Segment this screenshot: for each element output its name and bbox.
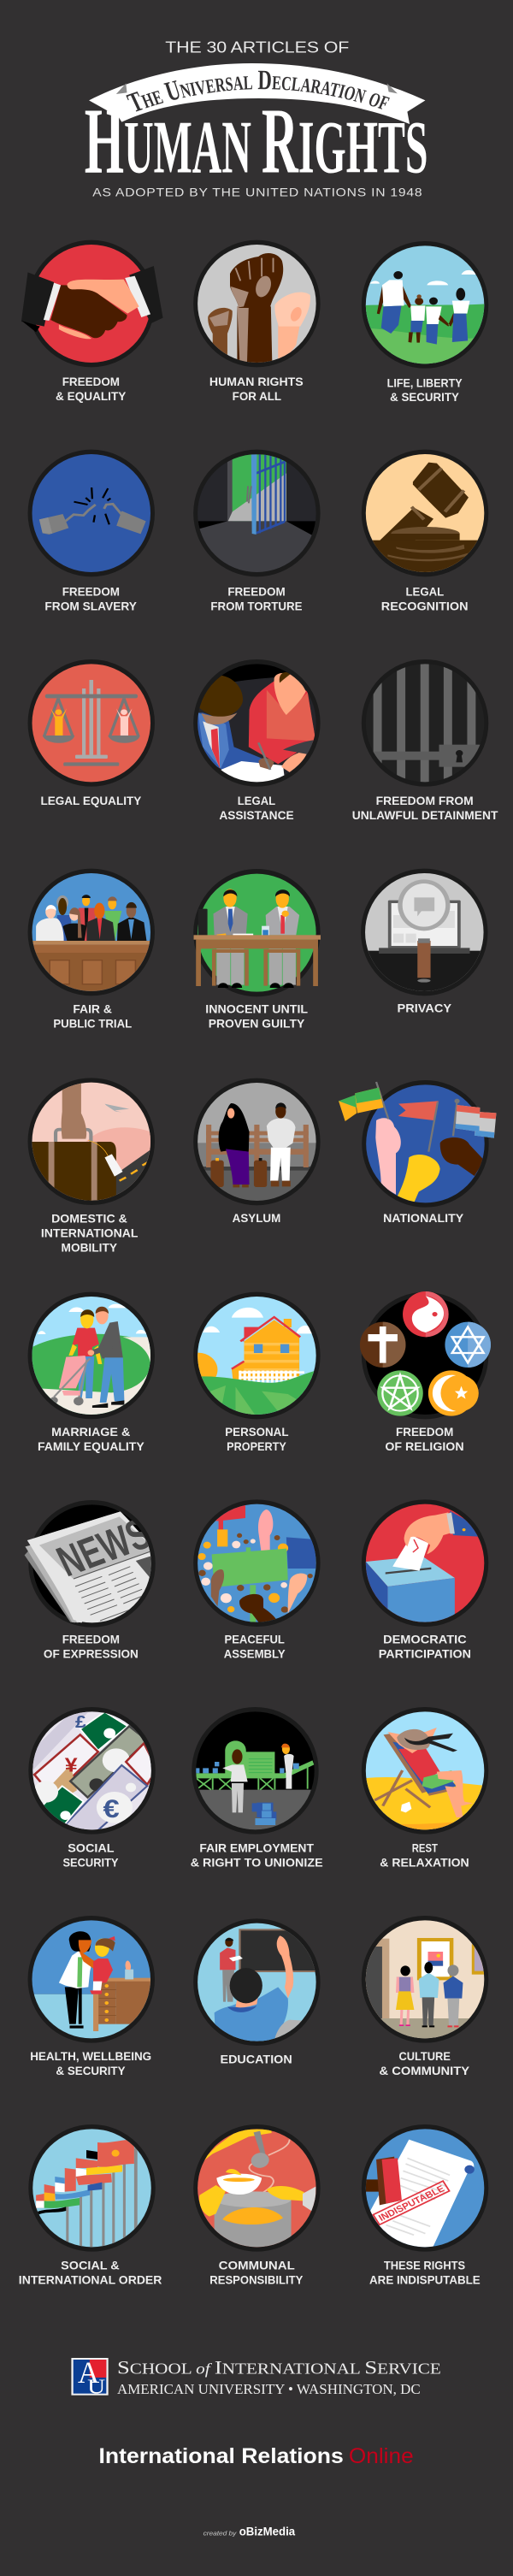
label [191,1843,323,1870]
label: ASSISTANCE [219,810,294,823]
label [224,1634,286,1661]
label: PEACEFUL [224,1634,285,1646]
icon: magnifier over laptop [360,869,491,996]
panel: education [193,1918,321,2066]
label [38,1427,144,1454]
panel: legal assistance [193,659,321,823]
label: LEGAL [405,587,444,599]
label: ARE INDISPUTABLE [369,2274,481,2287]
icon: person on deckchair [360,1707,491,1835]
logo: American University: U [87,2375,106,2398]
text: school of international service: SCHOOL of INTERNATIONAL SERVICE [117,2357,441,2378]
icon: gavel [360,450,491,577]
label: PRIVACY [398,1002,451,1015]
panel: democratic participation [360,1499,491,1661]
label: PUBLIC TRIAL [53,1019,132,1031]
icon: star of david [445,1322,491,1368]
panel: freedom from torture [193,450,321,613]
icon: doctor and child [28,1916,155,2043]
icon: house and fields [193,1291,320,1420]
panel: freedom of expression [25,1500,158,1661]
panel: fair and public trial [28,869,155,1031]
label [44,1634,139,1661]
panel: health, wellbeing and security [28,1916,155,2078]
label: SOCIAL [68,1843,115,1855]
label: INTERNATIONAL ORDER [19,2274,162,2287]
label: FAIR EMPLOYMENT [199,1843,314,1855]
label [385,1427,464,1454]
header: title block [85,39,428,199]
icon: banknotes: ¥ [65,1754,78,1776]
icon: scales of justice [28,659,155,787]
label: SOCIAL & [61,2260,120,2272]
label [225,1427,289,1454]
label [56,376,126,404]
label [30,2051,151,2078]
icon: jury [28,869,155,996]
panel: fair employment and right to unionize [191,1707,323,1870]
banner ribbon [89,63,425,124]
credit: created by obizmedia [203,2526,296,2538]
label [380,1843,469,1870]
panel: legal recognition [360,450,491,613]
credit: created by obizmedia: oBizMedia [239,2526,296,2538]
label: INNOCENT UNTIL [205,1004,308,1016]
icon: protest crowd and sign [193,1499,321,1628]
label: LEGAL [238,795,275,808]
brand: international relations online: Online [349,2444,414,2468]
panel: freedom from unlawful detainment [352,659,498,823]
label: & RIGHT TO UNIONIZE [191,1858,323,1870]
label: RECOGNITION [381,601,469,613]
text: american university, washington dc: AMERICAN UNIVERSITY • WASHINGTON, DC [117,2381,421,2398]
label: ASSEMBLY [224,1649,286,1661]
panel: these rights are indisputable [360,2124,491,2287]
heading: the universal declaration of: The Universal Declaration of [126,70,390,111]
label: PROVEN GUILTY [209,1019,304,1031]
label: PERSONAL [225,1427,289,1439]
icon: banknotes: £ [75,1712,86,1732]
icon: prison bars [360,659,491,787]
panel: social and international order [19,2124,162,2287]
label: CULTURE [398,2051,451,2064]
icon: row of flags [28,2124,157,2252]
panel: social security [28,1707,157,1870]
icon: handshake [21,240,163,367]
label [209,376,304,404]
label: FREEDOM [227,587,286,599]
icon: classroom [193,1918,321,2047]
label: INTERNATIONAL [41,1227,138,1240]
logo: American University [71,2355,109,2398]
label: HEALTH, WELLBEING [30,2051,151,2064]
panel: asylum [193,1078,321,1226]
icon: factory workers [192,1707,321,1835]
label [379,2051,469,2078]
label: FROM SLAVERY [44,601,137,613]
label: FAMILY EQUALITY [38,1441,144,1454]
icon: religious symbols [360,1291,491,1419]
panel: marriage and family equality [28,1292,155,1454]
icon: newspaper [25,1500,158,1628]
label: MOBILITY [62,1242,117,1255]
label: FREEDOM [396,1427,453,1439]
panel: innocent until proven guilty [193,869,321,1031]
label: FROM TORTURE [210,601,303,613]
icon: newspaper: NEWS [50,1510,158,1586]
label: HUMAN RIGHTS [209,376,304,389]
icon: suitcase and plane [28,1078,155,1205]
icon: banknotes: € [103,1794,120,1823]
icon: family in a field [360,241,491,369]
label [44,587,137,613]
icon: soup being served [193,2124,321,2252]
brand: international relations online: International Relations [99,2444,344,2468]
icon: raised hands with flags [339,1080,496,1208]
label: OF EXPRESSION [44,1649,139,1661]
panel: personal property [193,1291,320,1450]
label: FREEDOM [62,587,120,599]
panel: rest and relaxation [360,1707,491,1870]
subtitle: AS ADOPTED BY THE UNITED NATIONS IN 1948 [92,186,422,199]
panel: freedom and equality [21,240,163,404]
icon: pentacle [377,1370,423,1416]
label: FREEDOM FROM [376,795,474,808]
icon: couple with stroller [28,1292,155,1420]
icon: cross [360,1322,405,1368]
label: & EQUALITY [56,391,126,404]
label [381,587,469,613]
label: & SECURITY [390,392,459,405]
label [62,1843,119,1870]
label [53,1004,132,1031]
panel: human rights for all [193,240,321,404]
icon: stamped document [360,2124,491,2252]
label: OF RELIGION [385,1441,464,1454]
icon: open cell door [193,450,321,576]
label: NATIONALITY [383,1213,463,1226]
icon: ballot box [360,1499,491,1628]
label [219,795,294,823]
label [352,795,498,823]
credit: created by obizmedia: created by [203,2530,237,2538]
label: REST [412,1843,438,1855]
icon: art gallery [360,1916,491,2044]
footer [71,2355,441,2538]
label: PROPERTY [227,1441,286,1454]
label: UNLAWFUL DETAINMENT [352,810,498,823]
label: FAIR & [73,1004,112,1016]
label: EDUCATION [221,2053,292,2066]
panel: peaceful assembly [193,1499,321,1661]
icon: broken chains [28,450,155,576]
icon: lawyer and client [193,659,321,787]
label [19,2260,162,2287]
label: FREEDOM [62,376,120,389]
label: COMMUNAL [219,2260,295,2272]
icon: yin yang [403,1291,449,1337]
panel: culture and community [360,1916,491,2078]
panel: life, liberty and security [360,241,491,405]
label: & SECURITY [56,2065,126,2078]
icon: stamped document: INDISPUTABLE [377,2184,447,2224]
icon: crescent and star [428,1370,479,1416]
icon: refugees on a bench [193,1078,321,1205]
label: LEGAL EQUALITY [40,795,141,808]
label: PARTICIPATION [379,1649,471,1661]
label: FREEDOM [62,1634,120,1646]
panel: freedom from slavery [28,450,155,613]
label: SECURITY [62,1858,119,1870]
panel: nationality [339,1080,496,1226]
label: ASYLUM [233,1213,280,1226]
panel: domestic and international mobility [28,1078,155,1255]
panel: privacy [360,869,491,1015]
label [41,1214,138,1255]
label [387,377,463,405]
label [210,587,303,613]
icon: defendants at a table [193,869,321,996]
panel: legal equality [28,659,155,808]
heading: the 30 articles of: THE 30 ARTICLES OF [165,39,349,56]
label: RESPONSIBILITY [209,2274,304,2287]
label: MARRIAGE & [51,1427,131,1439]
logo: American University: A [78,2355,99,2390]
label [379,1634,471,1661]
label: THESE RIGHTS [384,2260,465,2272]
label: DEMOCRATIC [383,1634,467,1646]
label [205,1004,308,1031]
label [209,2260,304,2287]
panel: communal responsibility [193,2124,321,2287]
label: DOMESTIC & [51,1214,127,1226]
icon: banknotes [28,1707,157,1835]
label: LIFE, LIBERTY [387,377,463,390]
icon: raised fists [193,240,321,367]
panel: freedom of religion [360,1291,491,1454]
label: FOR ALL [233,391,281,404]
label [369,2260,481,2287]
label: & RELAXATION [380,1858,469,1870]
label: & COMMUNITY [379,2065,469,2078]
